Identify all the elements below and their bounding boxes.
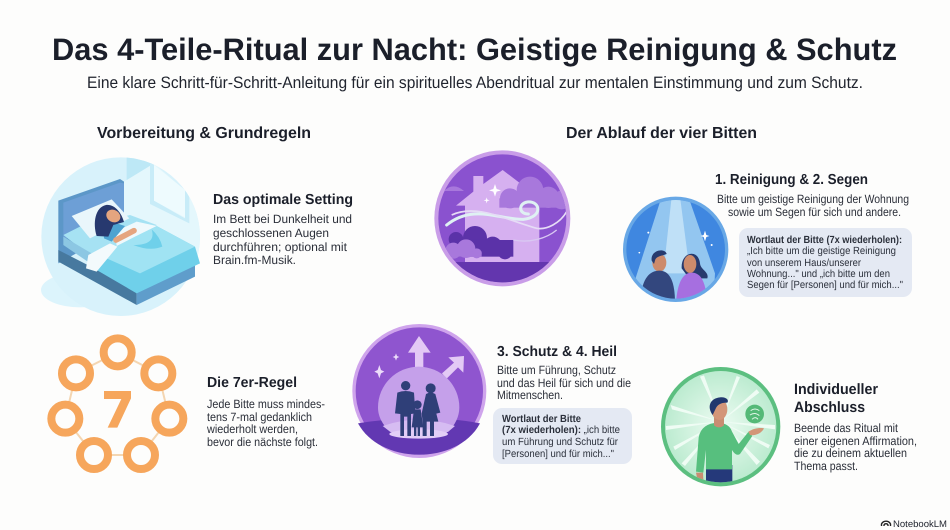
subtitle: Eine klare Schritt-für-Schritt-Anleitung für ein spirituelles Abendritual zur mentalen Einstimmung und zum Schutz. [87, 74, 863, 92]
text: rule of seven: bevor die nächste folgt. [207, 435, 318, 449]
text: protection and healing [497, 344, 631, 402]
text: cleansing and blessing: 1. Reinigung & 2. Segen [715, 172, 868, 188]
text: optimal setting: durchführen; optional mit [213, 240, 348, 254]
text: rule of seven [206, 375, 325, 449]
callout: wording of second request: Wortlaut der Bitte [502, 414, 581, 425]
icon: house cleansing [433, 150, 573, 290]
text: protection and healing: 3. Schutz & 4. Heil [497, 344, 617, 360]
text: optimal setting: Im Bett bei Dunkelheit und [213, 212, 352, 226]
callout: wording of first request: „Ich bitte um die geistige Reinigung [747, 246, 896, 257]
callout: wording of first request [739, 228, 912, 297]
text: rule of seven: tens 7-mal gedanklich [207, 410, 312, 424]
callout: wording of second request: [Personen] und für mich..." [502, 449, 614, 460]
callout: wording of first request: Segen für [Personen] und für mich..." [747, 280, 903, 291]
text: individual closing: Thema passt. [794, 459, 858, 473]
logo: NotebookLM: NotebookLM [893, 519, 947, 530]
callout: wording of first request: von unserem Haus/unserer [747, 258, 861, 269]
text: protection and healing: und das Heil für sich und die [497, 376, 631, 390]
text: cleansing and blessing [715, 172, 909, 219]
text: individual closing: Abschluss [794, 399, 865, 416]
text: protection and healing: Bitte um Führung, Schutz [497, 363, 616, 377]
callout: wording of second request: um Führung und Schutz für [502, 437, 618, 448]
icon: couple under blessing light [623, 197, 730, 303]
text: individual closing [794, 381, 917, 473]
text: cleansing and blessing: sowie um Segen für sich und andere. [728, 205, 901, 219]
icon: person sleeping in bed [41, 153, 207, 316]
text: individual closing: Beende das Ritual mit [794, 421, 899, 435]
icon: seven-ring cycle [51, 338, 183, 469]
text: rule of seven: wiederholt werden, [206, 422, 298, 436]
callout: wording of second request: (7x wiederholen): „ich bitte [502, 425, 620, 436]
text: optimal setting: Das optimale Setting [213, 192, 353, 208]
text: optimal setting [213, 192, 353, 267]
callout: wording of first request: Wohnung..." und „ich bitte um den [747, 269, 890, 280]
text: rule of seven: Jede Bitte muss mindes- [207, 397, 325, 411]
text: individual closing: die zu deinem aktuellen [794, 446, 907, 460]
text: rule of seven: Die 7er-Regel [207, 375, 297, 391]
callout: wording of first request: Wortlaut der Bitte (7x wiederholen): [747, 235, 902, 246]
icon: person with affirmation [661, 367, 780, 486]
text: protection and healing: Mitmenschen. [497, 388, 563, 402]
text: optimal setting: Brain.fm-Musik. [213, 253, 296, 267]
text: optimal setting: geschlossenen Augen [213, 226, 329, 240]
callout: wording of second request [493, 408, 632, 464]
text: cleansing and blessing: Bitte um geistige Reinigung der Wohnung [717, 192, 909, 206]
icon: family in protective dome [352, 324, 486, 458]
text: individual closing: einer eigenen Affirmation, [794, 434, 917, 448]
title: Das 4-Teile-Ritual zur Nacht: Geistige Reinigung & Schutz [52, 32, 897, 67]
heading: sequence: Der Ablauf der vier Bitten [566, 125, 757, 142]
heading: preparation: Vorbereitung & Grundregeln [97, 125, 311, 142]
text: individual closing: Individueller [794, 381, 878, 398]
